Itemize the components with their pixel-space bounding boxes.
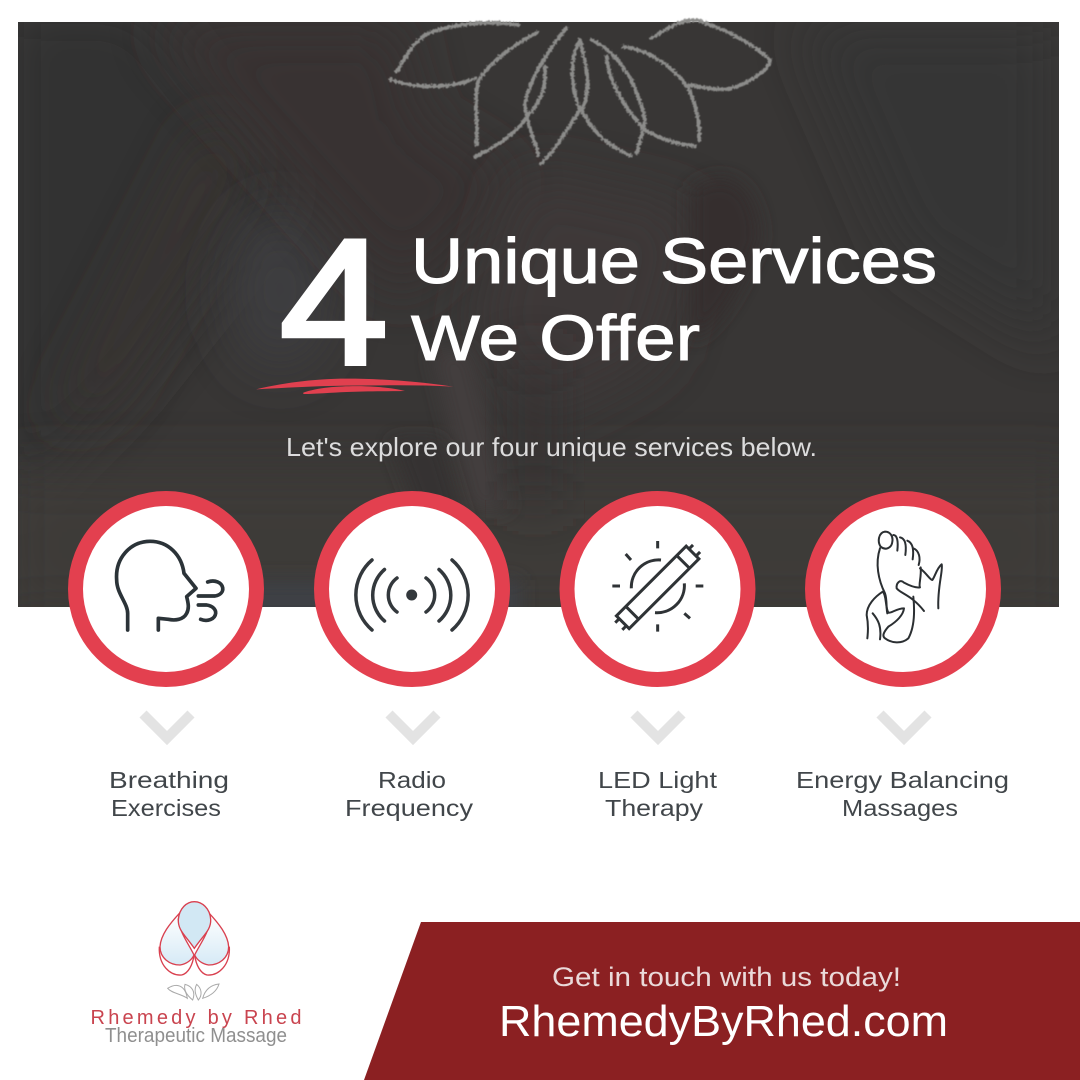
heading: Unique Services We Offer bbox=[411, 225, 937, 374]
red brush underline bbox=[256, 379, 453, 394]
service: breathing exercises bbox=[76, 498, 256, 821]
icon: head breathing out bbox=[117, 541, 223, 630]
panel: dark photo header bbox=[0, 0, 1080, 620]
label: Frequency bbox=[345, 795, 473, 821]
icon: chalk lotus bbox=[390, 20, 770, 164]
service: LED light therapy bbox=[567, 498, 748, 821]
logo: Rhemedy by Rhed bbox=[90, 902, 302, 1047]
icon: LED tube bbox=[612, 541, 703, 633]
icon: radio waves bbox=[356, 560, 468, 630]
numeral: 4: 4 bbox=[280, 202, 388, 402]
chevron bbox=[143, 714, 191, 738]
panel: call to action bbox=[364, 922, 1080, 1080]
label bbox=[109, 767, 229, 821]
CTA line: Get in touch with us today! bbox=[552, 962, 901, 992]
heading: Unique Services We Offer: Unique Services bbox=[411, 225, 937, 297]
label: Breathing bbox=[109, 767, 229, 793]
label bbox=[796, 767, 1009, 821]
logo name: Rhemedy by Rhed bbox=[90, 1007, 302, 1029]
logo mark: drops bbox=[159, 902, 229, 1000]
label: Radio bbox=[378, 767, 446, 793]
heading: Unique Services We Offer: We Offer bbox=[411, 302, 700, 374]
service: energy balancing massages bbox=[796, 498, 1009, 821]
label: Therapy bbox=[605, 795, 703, 821]
service: radio frequency bbox=[322, 498, 502, 821]
chevron bbox=[634, 714, 682, 738]
label bbox=[598, 767, 718, 821]
label: Massages bbox=[842, 795, 958, 821]
subheading: Let's explore our four unique services below. bbox=[286, 432, 817, 462]
label: Exercises bbox=[111, 795, 221, 821]
logo tagline: Therapeutic Massage bbox=[105, 1025, 287, 1047]
chevron bbox=[389, 714, 437, 738]
label: Energy Balancing bbox=[796, 767, 1009, 793]
label bbox=[345, 767, 473, 821]
icon: foot massage bbox=[867, 532, 942, 642]
chevron bbox=[880, 714, 928, 738]
label: LED Light bbox=[598, 767, 718, 793]
website: RhemedyByRhed.com bbox=[499, 997, 948, 1046]
